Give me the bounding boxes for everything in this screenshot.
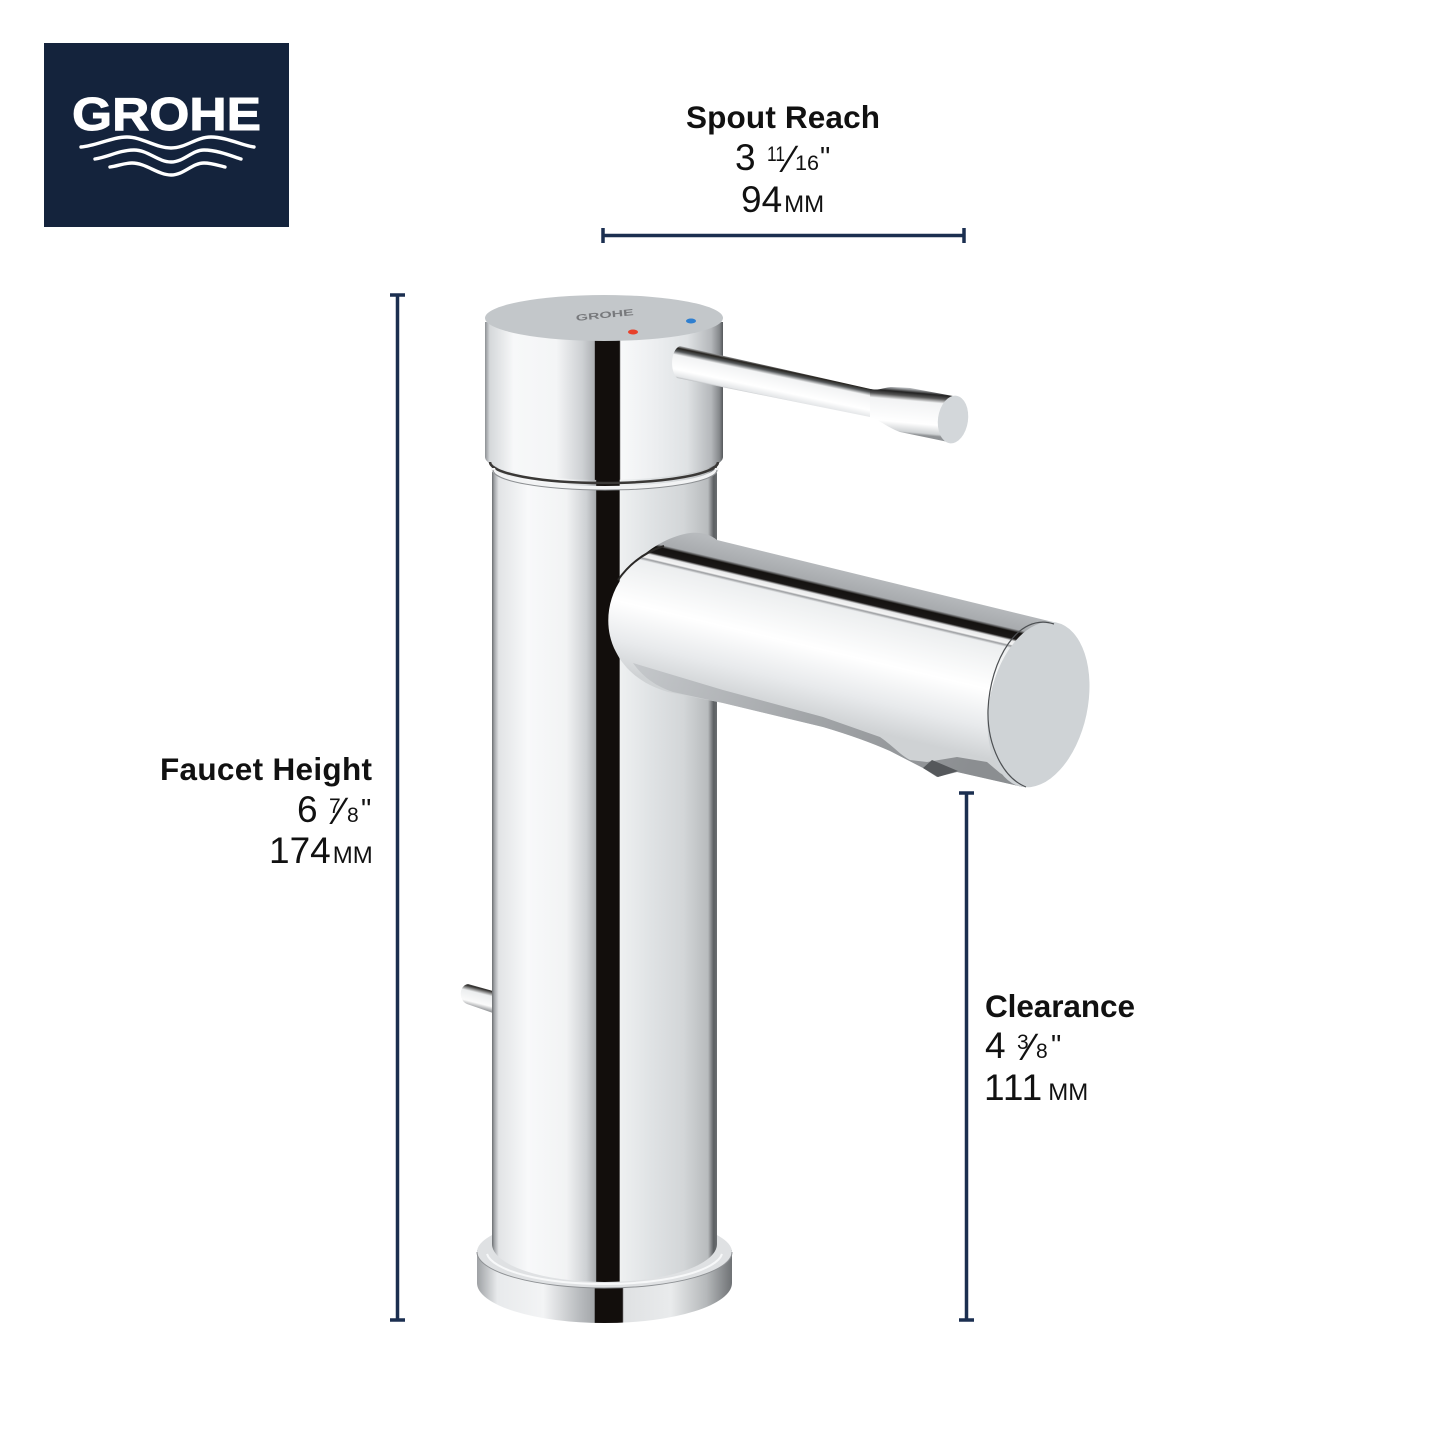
spout reach inches: 11 [767, 143, 785, 166]
clearance inches: 4 [985, 1025, 1006, 1066]
head top disc [485, 295, 723, 341]
spout reach millimetres: 94MM [741, 179, 824, 220]
clearance inches: ⁄ [1019, 1027, 1039, 1069]
faucet illustration [461, 295, 1104, 1323]
spout collar edge [618, 546, 664, 580]
logo wordmark: GROHE [72, 88, 261, 140]
head [485, 295, 723, 490]
clearance inches: 8 [1036, 1040, 1048, 1063]
spout reach dimension line [603, 228, 964, 243]
collar line [490, 462, 718, 490]
lever grip [870, 387, 953, 443]
spout reach label [686, 99, 880, 220]
pop-up rod [461, 984, 493, 1013]
cold indicator [686, 318, 696, 324]
body column [492, 460, 717, 1282]
spout reach inches: " [820, 142, 830, 174]
spout reach inches: 3 [735, 137, 756, 178]
spout reach inches: 16 [795, 152, 819, 175]
spout reach label: Spout Reach [686, 99, 880, 135]
top logo: GROHE [575, 307, 634, 323]
clearance dimension line [959, 793, 974, 1320]
spout end cap [973, 612, 1104, 797]
spout [608, 533, 1104, 797]
clearance inches: 3 [1017, 1031, 1029, 1054]
logo waves [81, 137, 254, 175]
faucet height inches: 7 [329, 795, 341, 818]
spout underside [633, 663, 1023, 787]
clearance inches: " [1051, 1030, 1061, 1062]
faucet height inches: ⁄ [329, 791, 349, 833]
lever [672, 346, 971, 445]
faucet height label [160, 751, 373, 871]
faucet height dimension line [390, 295, 405, 1320]
lever end cap [935, 394, 971, 445]
faucet height label: Faucet Height [160, 751, 372, 787]
spout nozzle [923, 760, 958, 777]
faucet height inches: 6 [297, 789, 318, 830]
faucet height inches: 8 [347, 804, 359, 827]
faucet height inches: " [361, 794, 371, 826]
clearance label [984, 988, 1135, 1108]
GROHE logo [44, 43, 289, 227]
clearance label: Clearance [985, 988, 1135, 1024]
spout reach inches: ⁄ [779, 139, 799, 181]
faucet height millimetres: 174MM [269, 830, 373, 871]
clearance millimetres: 111MM [984, 1067, 1088, 1108]
base [477, 1216, 732, 1323]
hot indicator [628, 330, 638, 334]
